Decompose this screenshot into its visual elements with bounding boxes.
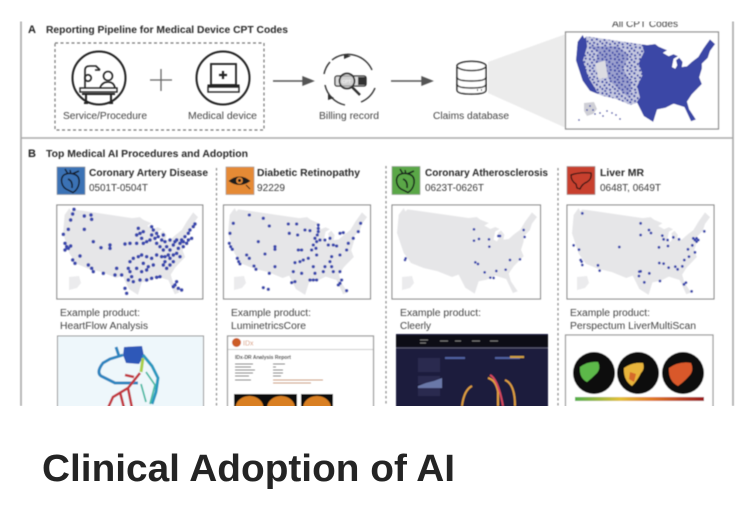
- thumbnail: IDx analysis report: [228, 336, 374, 420]
- example product text: LuminetricsCore: [231, 321, 306, 332]
- CPT code: 0648T, 0649T: [600, 183, 661, 194]
- panel frame: [21, 20, 733, 406]
- panel B heading: B: [28, 148, 36, 160]
- map: adoption diabetic retinopathy: [224, 205, 370, 299]
- CPT code: 0623T-0626T: [425, 183, 484, 194]
- icon: liver on red: [567, 166, 595, 194]
- icon: service procedure: [72, 52, 126, 104]
- column dividers: [216, 166, 558, 406]
- map: adoption coronary atherosclerosis: [392, 205, 540, 299]
- title: liver MR: Liver MR: [600, 167, 644, 179]
- arrow: to billing record: [273, 77, 313, 85]
- dashed box: billable service: [55, 43, 264, 130]
- example product text: Example product:: [60, 308, 140, 319]
- thumbnail: IDx analysis report: IDx: [243, 340, 254, 348]
- zoom funnel to map: [488, 34, 566, 128]
- example product text: Cleerly: [400, 321, 431, 332]
- icon: claims database: [457, 61, 486, 94]
- thumbnail: IDx analysis report: IDx-DR Analysis Report: [235, 355, 291, 361]
- CPT code: 0501T-0504T: [89, 183, 148, 194]
- label: medical device: Medical device: [188, 111, 257, 122]
- label: all CPT codes: All CPT Codes: [612, 19, 678, 30]
- column: coronary atherosclerosis: [392, 166, 548, 408]
- column: coronary artery disease: [57, 167, 208, 408]
- arrow: to claims database: [391, 77, 432, 85]
- example product text: Perspectum LiverMultiScan: [570, 321, 696, 332]
- title: coronary artery disease: Coronary Artery Disease: [89, 167, 208, 179]
- icon: medical device: [196, 52, 250, 104]
- plus sign: [150, 69, 172, 91]
- map: adoption coronary artery disease: [57, 205, 203, 299]
- column: diabetic retinopathy: [224, 167, 374, 420]
- panel B: top medical AI procedures: [28, 148, 714, 420]
- label: service procedure: Service/Procedure: [63, 111, 147, 122]
- label: claims database: Claims database: [433, 111, 509, 122]
- example product text: Example product:: [231, 308, 311, 319]
- label: billing record: Billing record: [319, 111, 379, 122]
- panel A heading: A: [28, 24, 36, 36]
- CPT code: 92229: [257, 183, 285, 194]
- panel B heading: Top Medical AI Procedures and Adoption: [46, 148, 248, 160]
- panel A heading: Reporting Pipeline for Medical Device CPT Codes: [46, 24, 288, 36]
- thumbnail: Cleerly dashboard: [396, 334, 548, 408]
- icon: heart on blue: [57, 167, 85, 194]
- thumbnail: Perspectum LiverMultiScan: [566, 335, 713, 408]
- example product text: HeartFlow Analysis: [60, 321, 148, 332]
- map: adoption liver MR: [567, 205, 714, 299]
- icon: eye on orange: [226, 167, 254, 194]
- icon: heart on green: [392, 166, 420, 194]
- example product text: Example product:: [570, 308, 650, 319]
- title: coronary atherosclerosis: Coronary Atherosclerosis: [425, 167, 548, 179]
- map: all CPT codes: [566, 32, 726, 132]
- example product text: Example product:: [400, 308, 481, 319]
- title: diabetic retinopathy: Diabetic Retinopathy: [257, 167, 360, 179]
- panel A: reporting pipeline: [28, 19, 726, 132]
- icon: billing record: CPT: [342, 79, 351, 84]
- thumbnail: HeartFlow coronary model: [58, 336, 204, 408]
- title: Clinical Adoption of AI: [42, 448, 455, 490]
- column: liver MR: [566, 166, 714, 408]
- icon: billing record: [324, 54, 375, 105]
